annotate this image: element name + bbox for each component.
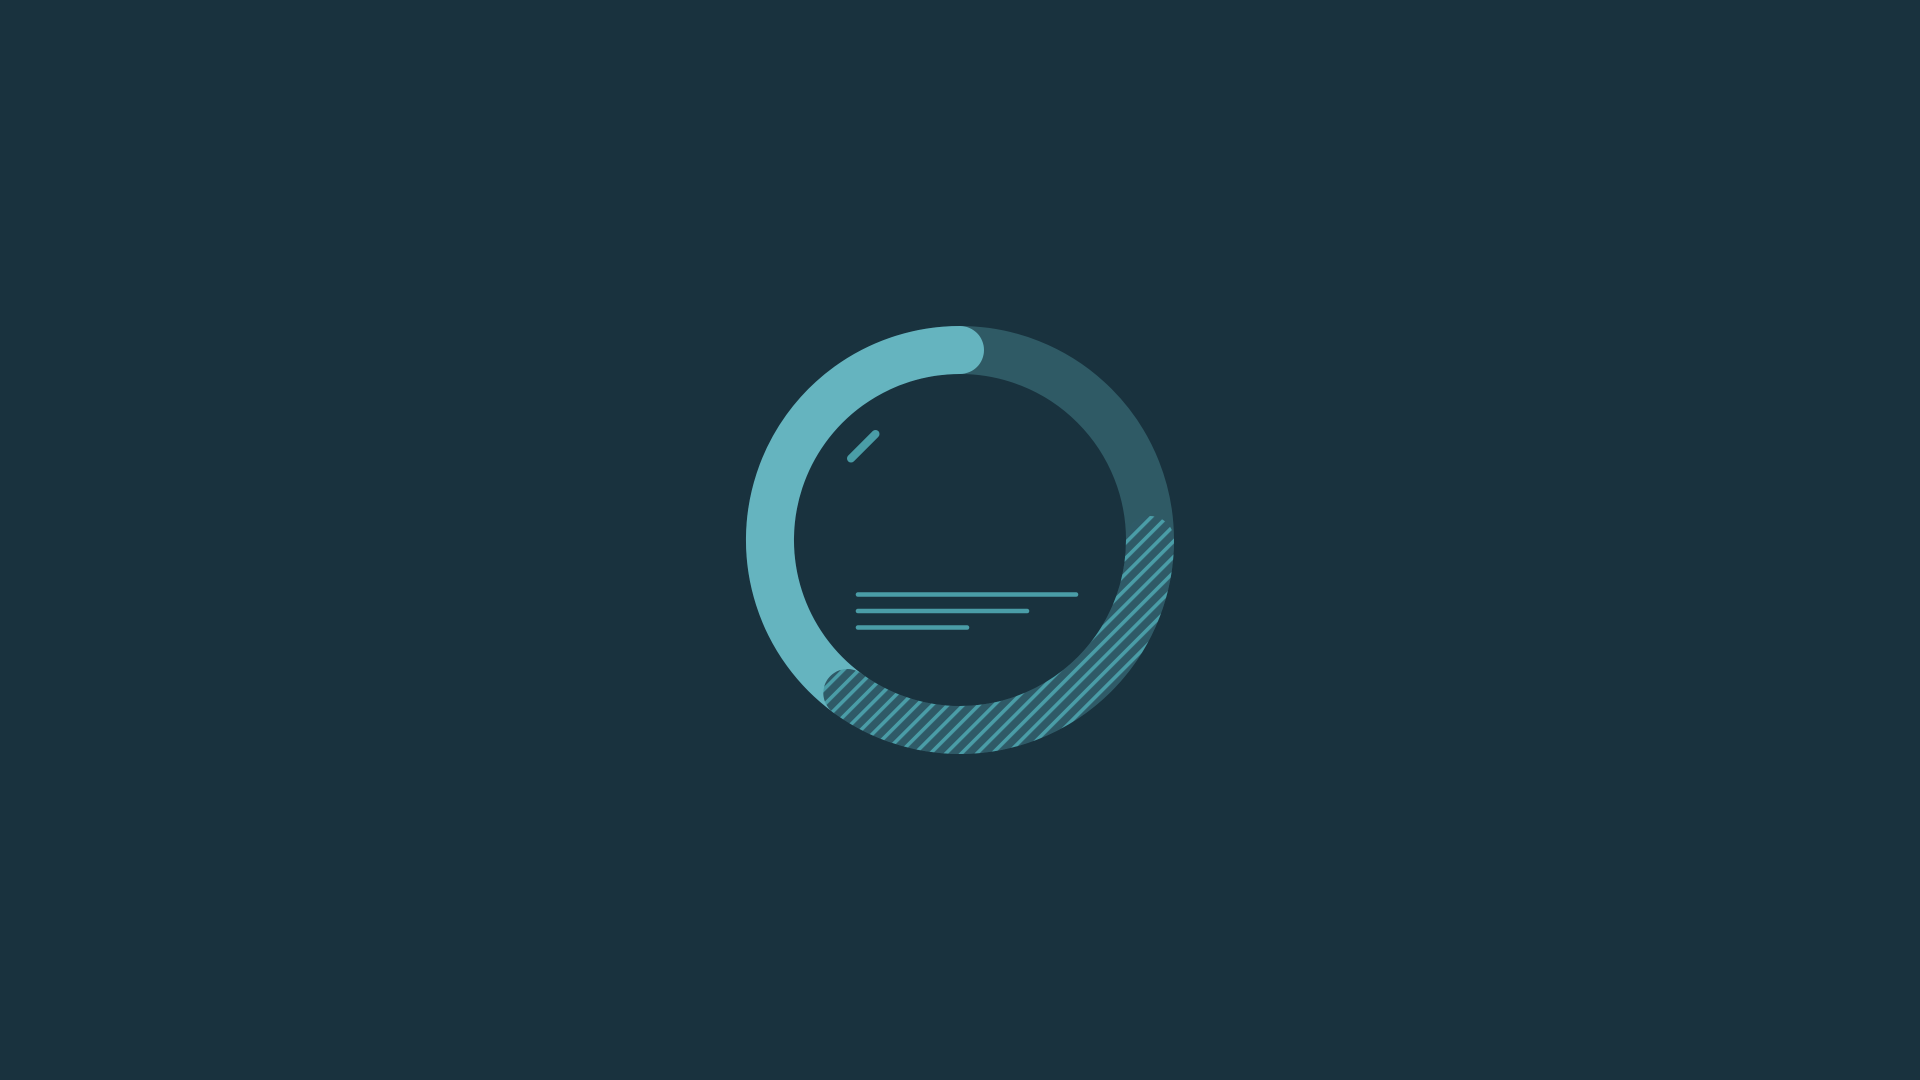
ring track [770,350,1150,730]
text placeholder lines [858,594,1076,628]
icon: diagonal highlight stroke [851,434,876,458]
light progress arc [770,350,960,693]
ring chart [770,350,1150,730]
hatched arc segment [847,540,1150,730]
